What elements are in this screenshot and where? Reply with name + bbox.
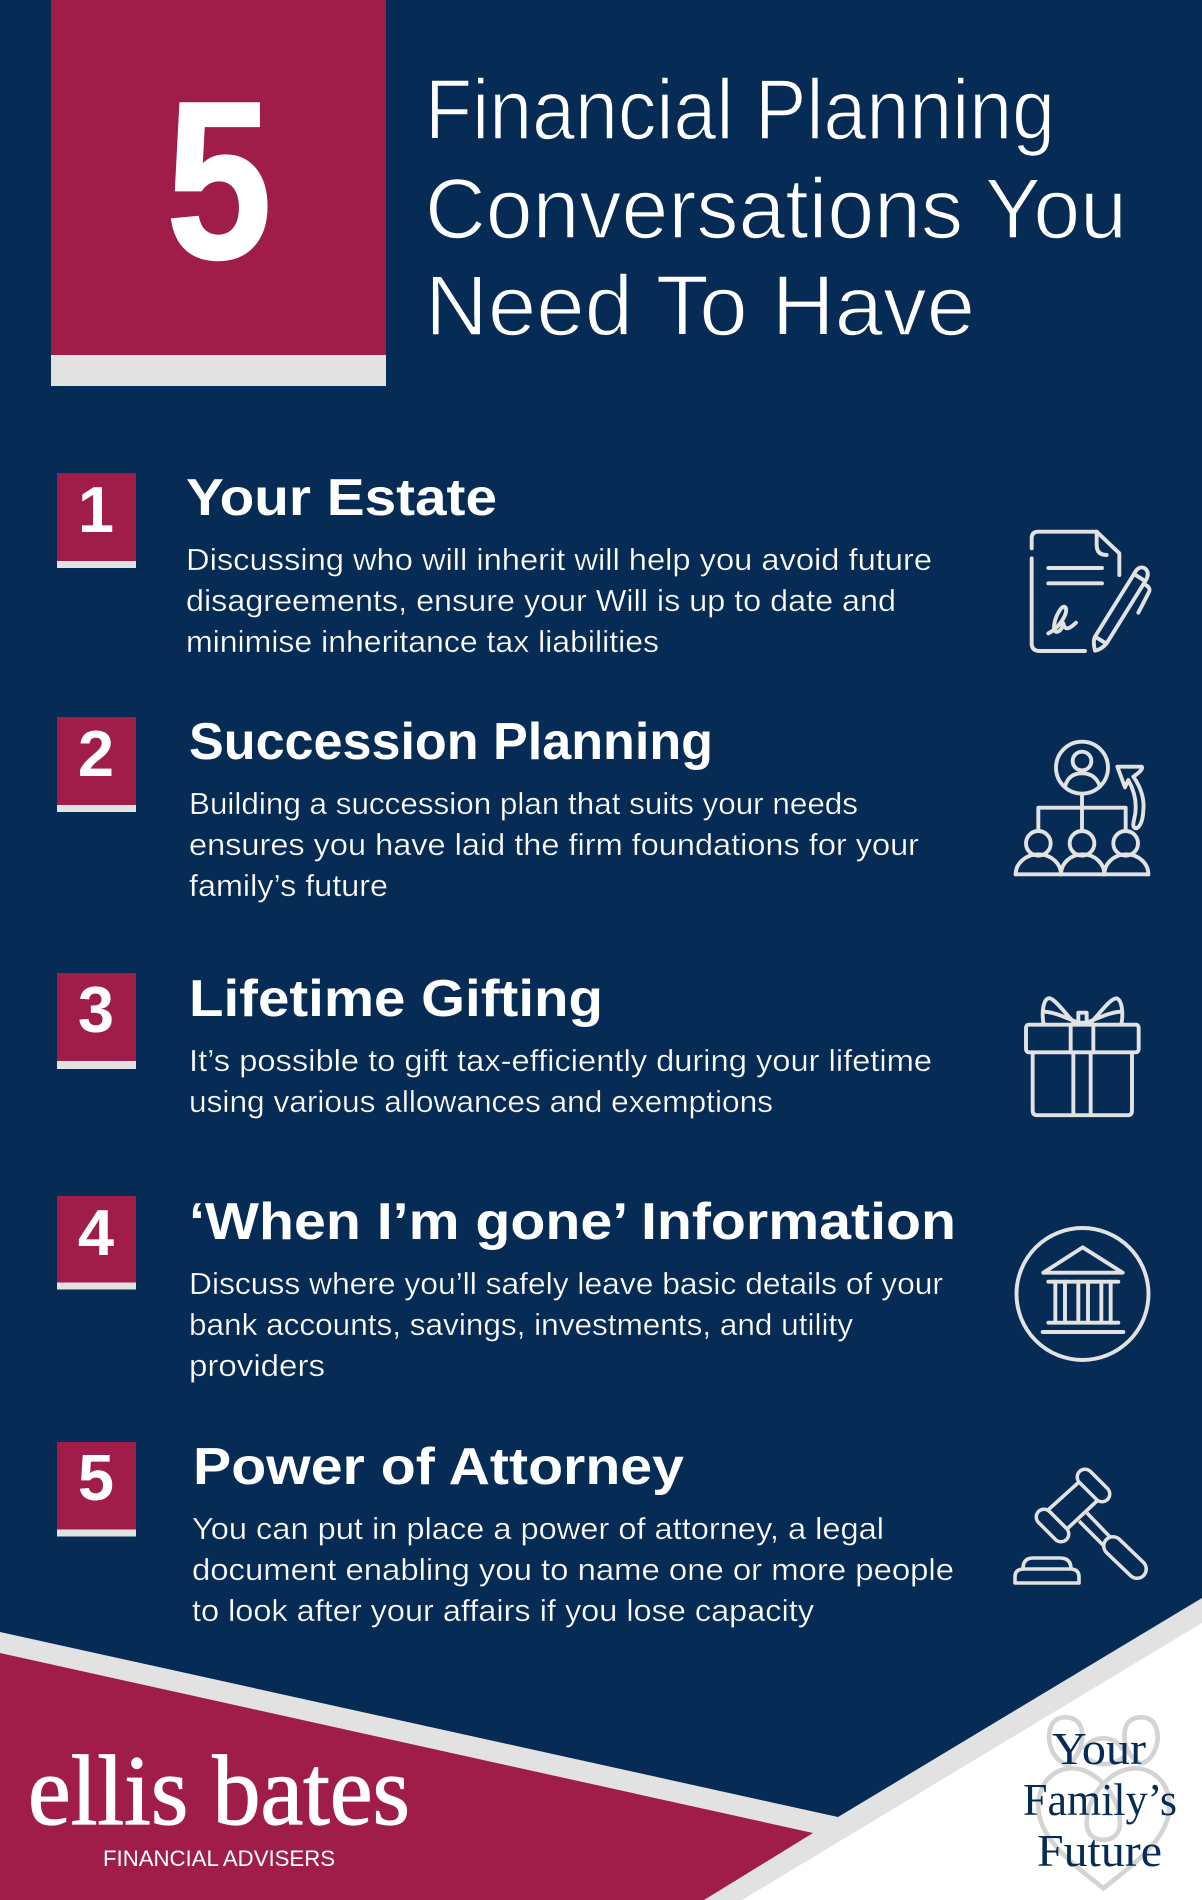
logo: your family's future heart	[1023, 1717, 1177, 1888]
heading: your estate: Your Estate	[186, 469, 497, 527]
number badge 1: 1	[78, 473, 114, 546]
icon: bank building in circle	[1016, 1228, 1148, 1360]
number badge 3	[57, 973, 136, 1069]
title: Financial Planning	[425, 63, 1055, 158]
text: succession planning	[189, 786, 919, 903]
number badge 2: 2	[78, 717, 114, 790]
header panel: big number five: 5	[166, 54, 272, 306]
number badge 5	[57, 1441, 136, 1536]
item 2: succession planning	[57, 713, 1148, 903]
heading: succession planning: Succession Planning	[189, 713, 713, 771]
text: succession planning: Building a succession plan that suits your needs	[189, 786, 858, 821]
item 1: your estate	[57, 469, 1150, 659]
text: your family's future: Family’s	[1023, 1774, 1177, 1825]
text: lifetime gifting	[189, 1043, 932, 1119]
text: when I'm gone information	[189, 1266, 943, 1383]
icon: gift box	[1026, 998, 1139, 1115]
icon: heart knot	[1038, 1717, 1169, 1888]
text: your family's future: Future	[1037, 1825, 1162, 1876]
text: power of attorney: You can put in place a power of attorney, a legal	[192, 1511, 884, 1546]
heading: when I'm gone information: ‘When I’m gone’ Information	[189, 1193, 956, 1251]
number badge 4: 4	[78, 1196, 114, 1269]
text: power of attorney: to look after your affairs if you lose capacity	[192, 1593, 815, 1628]
title: Need To Have	[425, 259, 975, 354]
text: your estate: Discussing who will inherit will help you avoid future	[186, 542, 932, 577]
text: when I'm gone information: Discuss where you’ll safely leave basic details of your	[189, 1266, 943, 1301]
footer background shapes	[0, 1598, 1202, 1900]
text: lifetime gifting: using various allowances and exemptions	[189, 1084, 773, 1119]
heading: power of attorney: Power of Attorney	[193, 1438, 684, 1496]
text: lifetime gifting: It’s possible to gift tax-efficiently during your lifetime	[189, 1043, 932, 1078]
item 3: lifetime gifting	[57, 970, 1139, 1119]
text: your family's future	[1023, 1723, 1177, 1876]
text: power of attorney	[192, 1511, 954, 1628]
number badge 2	[57, 717, 136, 812]
logo: ellis bates financial advisers: FINANCIAL ADVISERS	[103, 1846, 335, 1871]
title: Conversations You	[425, 162, 1127, 257]
item 4: when I'm gone information	[57, 1193, 1148, 1383]
title	[425, 63, 1127, 354]
number badge 4	[57, 1196, 136, 1290]
text: succession planning: family’s future	[189, 868, 388, 903]
icon: document and pen	[1032, 532, 1150, 651]
text: power of attorney: document enabling you to name one or more people	[192, 1552, 954, 1587]
text: when I'm gone information: bank accounts, savings, investments, and utility	[189, 1307, 854, 1342]
text: succession planning: ensures you have laid the firm foundations for your	[189, 827, 919, 862]
text: your estate: minimise inheritance tax liabilities	[186, 624, 659, 659]
number badge 5: 5	[78, 1441, 114, 1514]
text: when I'm gone information: providers	[189, 1348, 325, 1383]
icon: gavel	[1015, 1477, 1137, 1583]
number badge 1	[57, 473, 136, 568]
heading: lifetime gifting: Lifetime Gifting	[189, 970, 603, 1028]
number badge 3: 3	[78, 973, 114, 1046]
header panel: big number five	[51, 0, 386, 386]
item 5: power of attorney	[57, 1438, 1137, 1628]
logo: ellis bates financial advisers: ellis bates	[28, 1735, 410, 1846]
text: your family's future: Your	[1052, 1723, 1146, 1774]
text: your estate: disagreements, ensure your Will is up to date and	[186, 583, 896, 618]
icon: succession hierarchy	[1016, 742, 1148, 874]
text: your estate	[186, 542, 932, 659]
